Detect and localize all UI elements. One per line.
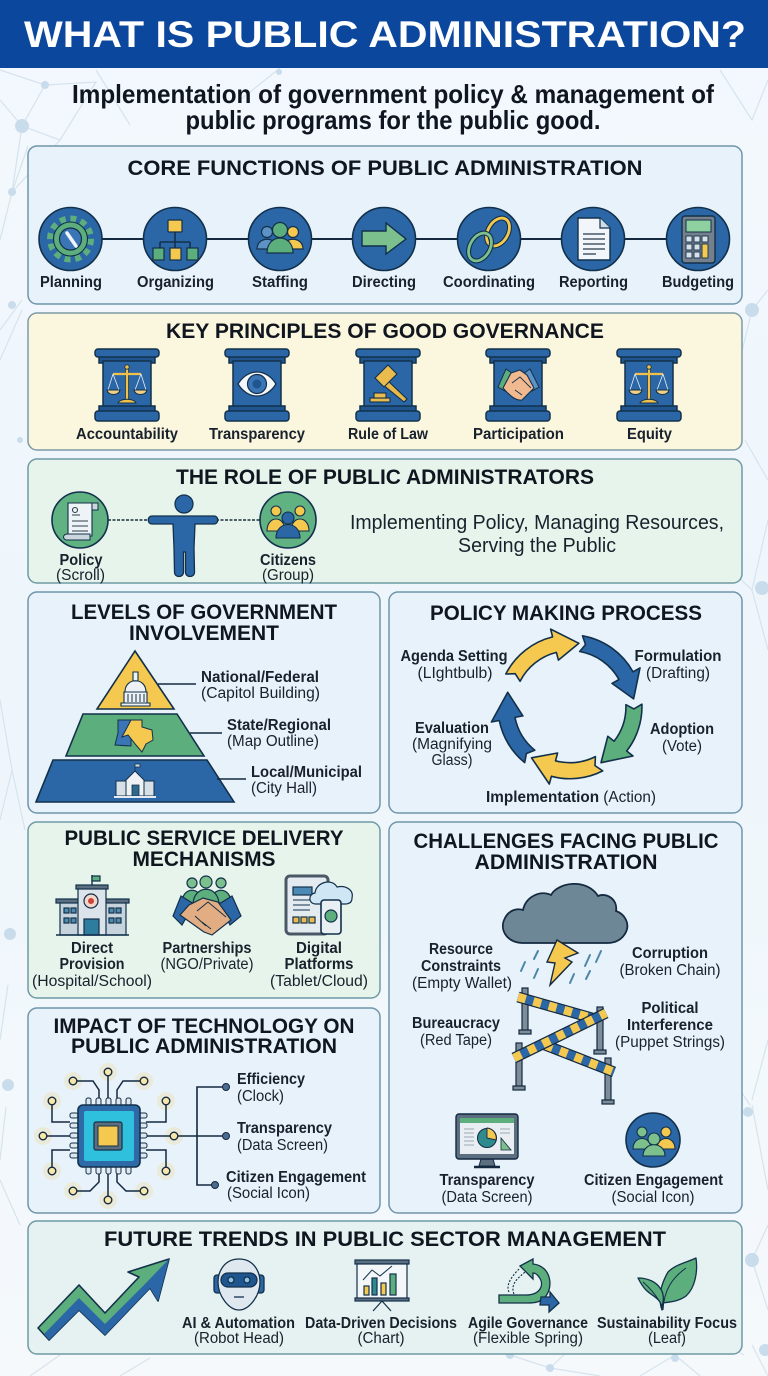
label: adoption: Adoption [650,721,714,738]
pyramid tier: national [97,651,320,709]
label: agenda setting: Agenda Setting [400,648,508,665]
label: digital platforms: (Tablet/Cloud) [270,973,368,990]
trend: ai and automation [182,1259,295,1347]
icon: policy scroll [52,492,108,548]
label: efficiency: Efficiency [237,1071,305,1088]
icon: rising trend arrow [38,1259,169,1340]
label: bureaucracy: (Red Tape) [420,1032,492,1049]
trend: sustainability focus: (Leaf) [648,1330,686,1347]
pillar: transparency: Transparency [209,426,305,443]
label: citizen engagement: Citizen Engagement [584,1172,723,1189]
label: citizen engagement [584,1172,723,1206]
role description [350,511,724,557]
label: policy: Policy [60,552,103,569]
pillar: transparency [209,349,305,443]
label: citizen engagement: (Social Icon) [612,1189,694,1206]
trend: data-driven decisions [305,1260,457,1347]
heading: challenges: ADMINISTRATION [474,851,658,874]
label: transparency [237,1120,332,1154]
panel: service delivery [28,822,380,998]
function: budgeting [662,208,734,291]
heading: key principles: KEY PRINCIPLES OF GOOD GOVERNANCE [166,320,604,343]
heading: service delivery: MECHANISMS [132,848,276,871]
label: policy: (Scroll) [56,567,105,584]
arrow: implementation [532,753,603,784]
label: political interference: Political [642,1000,698,1017]
function: organizing [137,208,214,291]
label: transparency: Transparency [440,1172,535,1189]
panel: impact of technology [28,1008,380,1213]
icon: barricade tape [513,988,614,1104]
heading: service delivery: PUBLIC SERVICE DELIVERY [64,827,344,850]
trend: sustainability focus: Sustainability Focus [597,1315,737,1332]
label: digital platforms: Digital [296,940,342,957]
label: agenda setting [400,648,508,682]
role description: Implementing Policy, Managing Resources, [350,511,724,534]
label: bureaucracy [412,1015,500,1049]
icon: partnership handshake [173,876,241,935]
heading: service delivery [64,827,344,871]
label: partnerships [160,940,254,973]
trend: data-driven decisions: (Chart) [358,1330,404,1347]
label: agenda setting: (LIghtbulb) [418,665,492,682]
icon: hospital school building [56,875,129,935]
pyramid tier: local: Local/Municipal [251,764,362,781]
label: formulation: Formulation [634,648,722,665]
icon: data screen monitor [456,1114,518,1167]
label: citizen engagement: (Social Icon) [227,1185,310,1202]
pyramid tier: local [36,760,362,802]
pillar: participation: Participation [473,426,564,443]
panel: policy making process [389,592,742,813]
trend: ai and automation: AI & Automation [182,1315,295,1332]
label: formulation [634,648,722,682]
function: directing [352,208,416,291]
label: evaluation: (Magnifying [412,736,492,753]
label: resource constraints: (Empty Wallet) [412,975,512,992]
label: citizens [260,552,316,584]
label: corruption: Corruption [632,945,708,962]
subtitle [72,79,714,135]
function: staffing: Staffing [252,274,308,291]
pillar: equity [617,349,681,443]
pyramid tier: state: (Map Outline) [227,733,319,750]
heading: role: THE ROLE OF PUBLIC ADMINISTRATORS [176,466,594,489]
icon: citizens group [260,492,316,548]
label: efficiency [237,1071,305,1105]
arrow: evaluation [491,692,535,763]
function: coordinating [443,208,535,291]
pillar: equity: Equity [627,426,672,443]
label: policy [56,552,105,584]
label: corruption [620,945,720,979]
connector tree [147,1084,230,1188]
heading: levels: LEVELS OF GOVERNMENT [71,601,337,624]
label: evaluation: Glass) [432,752,472,769]
heading: challenges [414,830,718,874]
icon: tablet and cloud [286,876,352,934]
label: partnerships: Partnerships [162,940,252,957]
label: formulation: (Drafting) [646,665,710,682]
trend: data-driven decisions: Data-Driven Decisions [305,1315,457,1332]
label: resource constraints [412,941,512,992]
heading: levels [71,601,337,645]
label: direct provision: Provision [60,956,124,973]
label: citizen engagement: Citizen Engagement [226,1169,366,1186]
function: planning: Planning [40,274,102,291]
function: planning [39,208,102,291]
label: transparency: Transparency [237,1120,332,1137]
icon: microchip [34,1063,183,1209]
function: organizing: Organizing [137,274,214,291]
pillar: accountability [76,349,178,443]
label: adoption: (Vote) [662,738,702,755]
trend: agile governance: (Flexible Spring) [473,1330,583,1347]
label: transparency [440,1172,535,1206]
label: evaluation [412,720,492,769]
label: direct provision [32,940,152,990]
heading: future trends: FUTURE TRENDS IN PUBLIC SECTOR MANAGEMENT [104,1228,666,1251]
pillar: rule of law [348,349,429,443]
function: reporting [559,208,628,291]
arrow: agenda setting [506,629,579,681]
heading: technology: IMPACT OF TECHNOLOGY ON [54,1015,354,1038]
heading: technology [54,1015,354,1058]
icon: public administrator figure [148,495,218,576]
label: direct provision: (Hospital/School) [32,973,152,990]
function: staffing [248,208,312,291]
label: resource constraints: Constraints [421,958,501,975]
label: efficiency: (Clock) [237,1088,284,1105]
label: evaluation: Evaluation [415,720,489,737]
heading: core functions: CORE FUNCTIONS OF PUBLIC ADMINISTRATION [128,157,642,180]
label: digital platforms [270,940,368,990]
icon: citizen engagement circle [626,1113,680,1167]
function: coordinating: Coordinating [443,274,535,291]
trend: agile governance [468,1259,588,1347]
label: citizens: Citizens [260,552,316,569]
label: adoption [650,721,714,755]
label: partnerships: (NGO/Private) [160,956,254,973]
pillar: participation [473,349,564,443]
panel: key principles [28,313,742,450]
heading: technology: PUBLIC ADMINISTRATION [71,1035,337,1058]
label: bureaucracy: Bureaucracy [412,1015,500,1032]
subtitle: Implementation of government policy & management of [72,79,714,109]
function: budgeting: Budgeting [662,274,734,291]
label: resource constraints: Resource [429,941,493,958]
pillar: rule of law: Rule of Law [348,426,429,443]
label: corruption: (Broken Chain) [620,962,720,979]
label: political interference [615,1000,725,1051]
arrow: formulation [580,636,640,699]
label: direct provision: Direct [71,940,113,957]
label: political interference: Interference [627,1017,713,1034]
title banner: WHAT IS PUBLIC ADMINISTRATION? [24,14,746,55]
label: transparency: (Data Screen) [442,1189,532,1206]
panel: levels of government [28,592,380,813]
trend: sustainability focus [597,1258,737,1347]
heading: challenges: CHALLENGES FACING PUBLIC [414,830,718,853]
pyramid tier: state: State/Regional [227,717,331,734]
pillar: accountability: Accountability [76,426,178,443]
pyramid tier: national: (Capitol Building) [201,685,320,702]
subtitle: public programs for the public good. [186,105,600,135]
trend: agile governance: Agile Governance [468,1315,588,1332]
trend: ai and automation: (Robot Head) [194,1330,284,1347]
heading: policy making: POLICY MAKING PROCESS [430,602,702,625]
label: political interference: (Puppet Strings) [615,1034,725,1051]
panel: role of public administrators [28,459,742,584]
label: citizens: (Group) [262,567,314,584]
pyramid tier: national: National/Federal [201,669,319,686]
panel: future trends [28,1221,742,1354]
panel: challenges [389,822,742,1213]
label: implementation: Implementation (Action) [486,789,656,806]
arrow: adoption [601,704,642,763]
label: digital platforms: Platforms [284,956,354,973]
function: reporting: Reporting [559,274,628,291]
role description: Serving the Public [458,534,616,557]
heading: levels: INVOLVEMENT [129,622,279,645]
pyramid tier: state [66,714,331,756]
label: citizen engagement [226,1169,366,1202]
label: transparency: (Data Screen) [237,1137,328,1154]
function: directing: Directing [352,274,416,291]
panel: core functions [28,146,742,304]
title banner [0,0,768,68]
icon: storm cloud [503,884,627,985]
pyramid tier: local: (City Hall) [251,780,317,797]
